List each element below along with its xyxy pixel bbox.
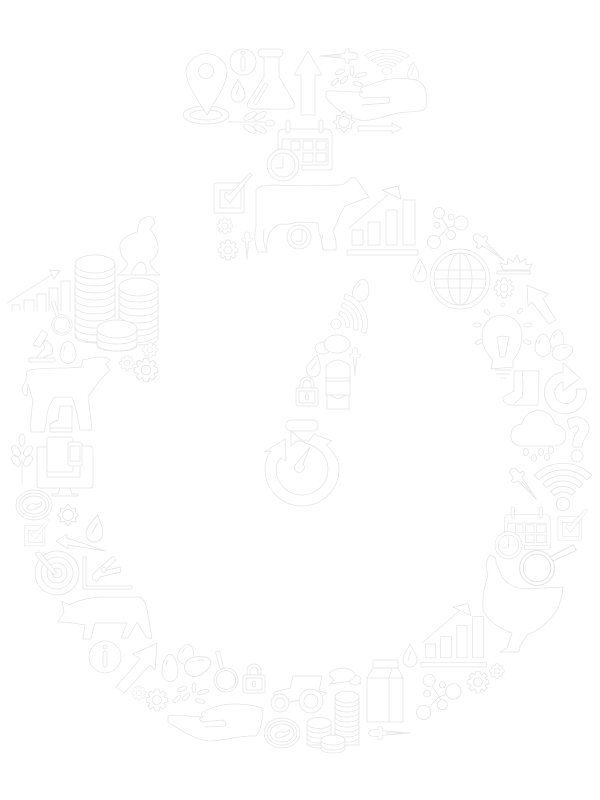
icon: drop: [85, 513, 106, 543]
panel: left ring icons: [7, 217, 160, 673]
icon: sun: [333, 111, 355, 133]
icon: gears: [467, 664, 504, 693]
icon: petri dish: [16, 490, 52, 520]
icon: question mark: [567, 417, 589, 462]
icon: checkbox: [25, 519, 50, 546]
icon: wifi: [534, 463, 592, 511]
icon: petri dish: [264, 718, 300, 748]
right stack: [119, 278, 158, 345]
icon: speech bubbles: [329, 668, 361, 685]
icon: coin stacks: [75, 255, 158, 351]
icon: scatter chart: [83, 556, 132, 589]
front coin stack: [321, 735, 345, 753]
icon: hand: [168, 704, 262, 741]
icon: eggs: [535, 329, 575, 363]
icon: drop: [403, 644, 417, 667]
icon: calendar with clock: [267, 120, 332, 181]
icon: drop by hand: [407, 62, 419, 80]
icon: speech bubbles: [315, 335, 350, 354]
panel: bottom ring icons: [116, 604, 504, 753]
icon: gear: [494, 278, 514, 298]
icon: flask: [247, 49, 295, 109]
icon: magnifier: [200, 649, 247, 696]
icon: microscope: [29, 330, 55, 362]
icon: coins: [307, 691, 359, 753]
icon: tractor: [271, 676, 327, 713]
icon: molecule: [428, 208, 468, 248]
icon: up-right arrow: [116, 643, 157, 693]
icon: pipette down: [350, 348, 360, 376]
icon: water drop: [231, 79, 245, 102]
icon: cloud with rain: [511, 410, 566, 462]
icon: wifi: [365, 49, 409, 74]
icon: checkbox: [214, 173, 252, 213]
icon: seeds: [172, 683, 209, 704]
icon: gears: [132, 686, 168, 711]
icon: right arrow: [358, 123, 402, 133]
icon: globe: [430, 249, 490, 309]
chart: left rising bars: [7, 270, 70, 311]
short coin stack: [307, 718, 331, 748]
icon: pipette: [369, 726, 410, 740]
icon: seeds: [330, 66, 367, 87]
icon: pipette: [469, 229, 509, 266]
icon: calf: [22, 357, 110, 432]
icon: rising bar chart: [347, 186, 418, 255]
icon: up-left arrow: [527, 285, 556, 324]
icon: hen: [483, 555, 563, 652]
icon: calendar with clock: [495, 507, 550, 559]
panel: right ring icons: [413, 208, 592, 652]
icon: milk carton: [367, 660, 403, 722]
icon: hand: [326, 78, 427, 120]
icon: pig: [58, 597, 152, 639]
icon: light bulb: [473, 303, 532, 378]
icon: wheat: [228, 110, 275, 135]
icon: sun on horizon: [497, 255, 532, 274]
icon: checkbox: [558, 509, 588, 540]
icon: info: [230, 49, 256, 75]
icon: pipette vertical: [242, 232, 252, 260]
icon: info: [89, 641, 121, 673]
icon: lock: [296, 377, 318, 406]
icon: wheat vertical: [10, 434, 34, 485]
icon: monitor with tablet and phone: [37, 437, 93, 496]
icon: pipette: [320, 49, 358, 63]
icon: drop: [305, 353, 324, 378]
icon: gears cluster: [120, 343, 158, 382]
icon: magnifier: [40, 300, 79, 339]
icon: refresh arrow: [544, 363, 586, 414]
icon: up arrow: [294, 51, 322, 115]
icon: stopwatch: [264, 420, 339, 506]
icon: location pin: [183, 54, 229, 124]
icon: molecule: [417, 674, 461, 720]
icon: lock: [243, 664, 265, 693]
back stack: [75, 255, 115, 343]
icon: rising bar chart: [421, 604, 486, 667]
icon: egg: [60, 341, 76, 364]
icon: drop: [413, 259, 427, 282]
panel: stopwatch crown icons: [183, 49, 427, 260]
icon: wifi rotated: [321, 290, 374, 346]
icon: gears: [217, 218, 238, 260]
tall coin stack: [335, 691, 359, 745]
front stack: [97, 320, 137, 351]
icon: pipette: [505, 464, 542, 504]
icon: silo: [325, 360, 351, 409]
icon: cow with clock: [255, 178, 369, 252]
icon: eggs: [162, 642, 214, 682]
icon: sun: [57, 504, 79, 526]
icon: egg: [351, 277, 372, 303]
panel: centre hand of the stopwatch: [264, 277, 374, 506]
icon: boots: [503, 371, 539, 405]
icon: chicken: [117, 217, 160, 275]
icon: target: [35, 551, 79, 595]
icon: left arrow: [56, 534, 106, 551]
icon: boots: [50, 406, 72, 432]
icon: magnifier: [515, 531, 578, 594]
